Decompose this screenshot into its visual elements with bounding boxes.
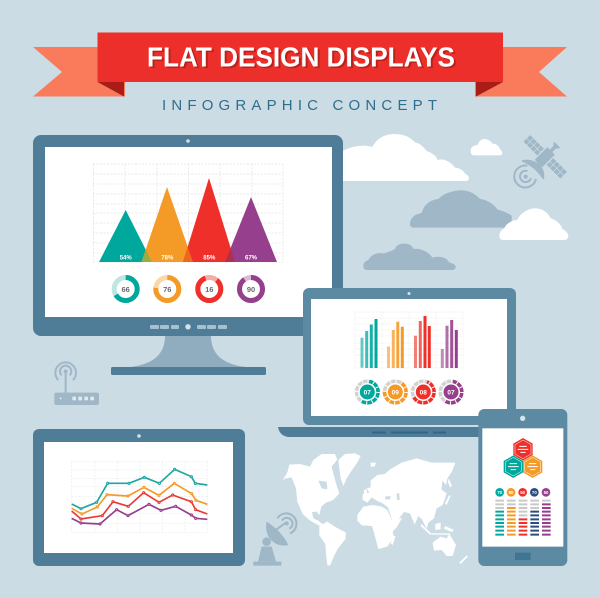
donut values: 66 xyxy=(122,285,130,294)
world map xyxy=(282,453,468,566)
monitor base xyxy=(111,367,266,375)
teal hexagon xyxy=(504,455,523,478)
laptop lid xyxy=(303,288,516,425)
gauge centres and values: 07 xyxy=(364,390,371,396)
triangle chart: 85% xyxy=(203,256,216,262)
bar chart xyxy=(360,316,458,368)
triangle chart: 78% xyxy=(161,256,174,262)
monitor stand xyxy=(130,336,246,367)
red hexagon xyxy=(513,438,533,461)
monitor body xyxy=(33,135,343,336)
laptop screen xyxy=(311,299,507,416)
gauge centres and values: 07 xyxy=(447,390,455,396)
percentage badges: 50 xyxy=(520,490,526,495)
donut values: 90 xyxy=(247,285,255,294)
phone home button xyxy=(515,553,531,560)
phone camera xyxy=(520,416,525,421)
South America xyxy=(319,522,346,566)
icon: satellite dish xyxy=(253,513,296,566)
percentage badges: 80 xyxy=(509,490,514,495)
monitor screen xyxy=(45,147,332,317)
triangle chart: 67% xyxy=(245,256,258,262)
percentage badges xyxy=(495,488,550,497)
Hudson Bay xyxy=(318,481,327,489)
grey cloud lower xyxy=(363,243,456,270)
phone screen xyxy=(482,428,563,547)
inland seas xyxy=(385,493,400,500)
tablet body xyxy=(33,429,245,566)
subtitle: INFOGRAPHIC CONCEPT xyxy=(162,97,437,114)
laptop xyxy=(278,288,516,437)
monitor camera xyxy=(186,139,190,143)
laptop keyboard base xyxy=(278,427,490,437)
red line xyxy=(72,492,207,520)
title ribbon: FLAT DESIGN DISPLAYS xyxy=(149,43,457,74)
phone body xyxy=(478,409,567,566)
icon: satellite xyxy=(514,126,576,187)
donut values: 16 xyxy=(205,285,213,294)
stacked level bars xyxy=(495,501,551,535)
title ribbon: FLAT DESIGN DISPLAYS xyxy=(147,42,455,72)
triangle chart xyxy=(99,178,277,262)
percentage badges: 70 xyxy=(532,490,537,495)
Greenland xyxy=(338,453,361,486)
grey cloud middle xyxy=(410,190,512,228)
monitor buttons xyxy=(150,324,227,329)
tablet camera xyxy=(137,434,141,438)
Australia xyxy=(433,534,456,556)
phone xyxy=(478,409,567,566)
bar chart grid xyxy=(355,312,463,368)
laptop camera xyxy=(408,292,410,295)
teal line xyxy=(72,468,207,510)
title ribbon xyxy=(33,32,567,96)
clouds xyxy=(342,134,568,270)
orange hexagon xyxy=(523,455,542,478)
gauge centres and values xyxy=(360,384,458,400)
tablet xyxy=(33,429,245,566)
gauge centres and values: 08 xyxy=(420,390,427,396)
purple line xyxy=(72,503,207,525)
Indonesia xyxy=(421,523,454,535)
triangle chart grid xyxy=(93,164,283,262)
segmented gauges xyxy=(355,377,464,407)
Eurasia xyxy=(363,458,455,529)
donut gauges xyxy=(114,273,262,305)
hexagon diagram xyxy=(504,438,542,478)
line chart grid xyxy=(72,462,207,532)
donut values: 76 xyxy=(163,285,171,294)
islands xyxy=(364,463,468,564)
gauge centres and values: 09 xyxy=(392,390,399,396)
tablet screen xyxy=(44,442,233,553)
donut values xyxy=(122,285,255,294)
line chart xyxy=(72,462,207,532)
Africa xyxy=(357,505,402,549)
percentage badges: 70 xyxy=(497,490,503,495)
triangle chart: 54% xyxy=(120,256,132,262)
orange line xyxy=(72,482,207,515)
North America xyxy=(282,454,339,525)
laptop base marks xyxy=(372,432,446,434)
percentage badges: 50 xyxy=(544,490,549,495)
icon: router xyxy=(54,362,99,405)
small white cloud xyxy=(471,139,502,155)
monitor xyxy=(33,135,343,375)
white large cloud xyxy=(342,134,469,181)
white cloud right xyxy=(499,208,568,240)
